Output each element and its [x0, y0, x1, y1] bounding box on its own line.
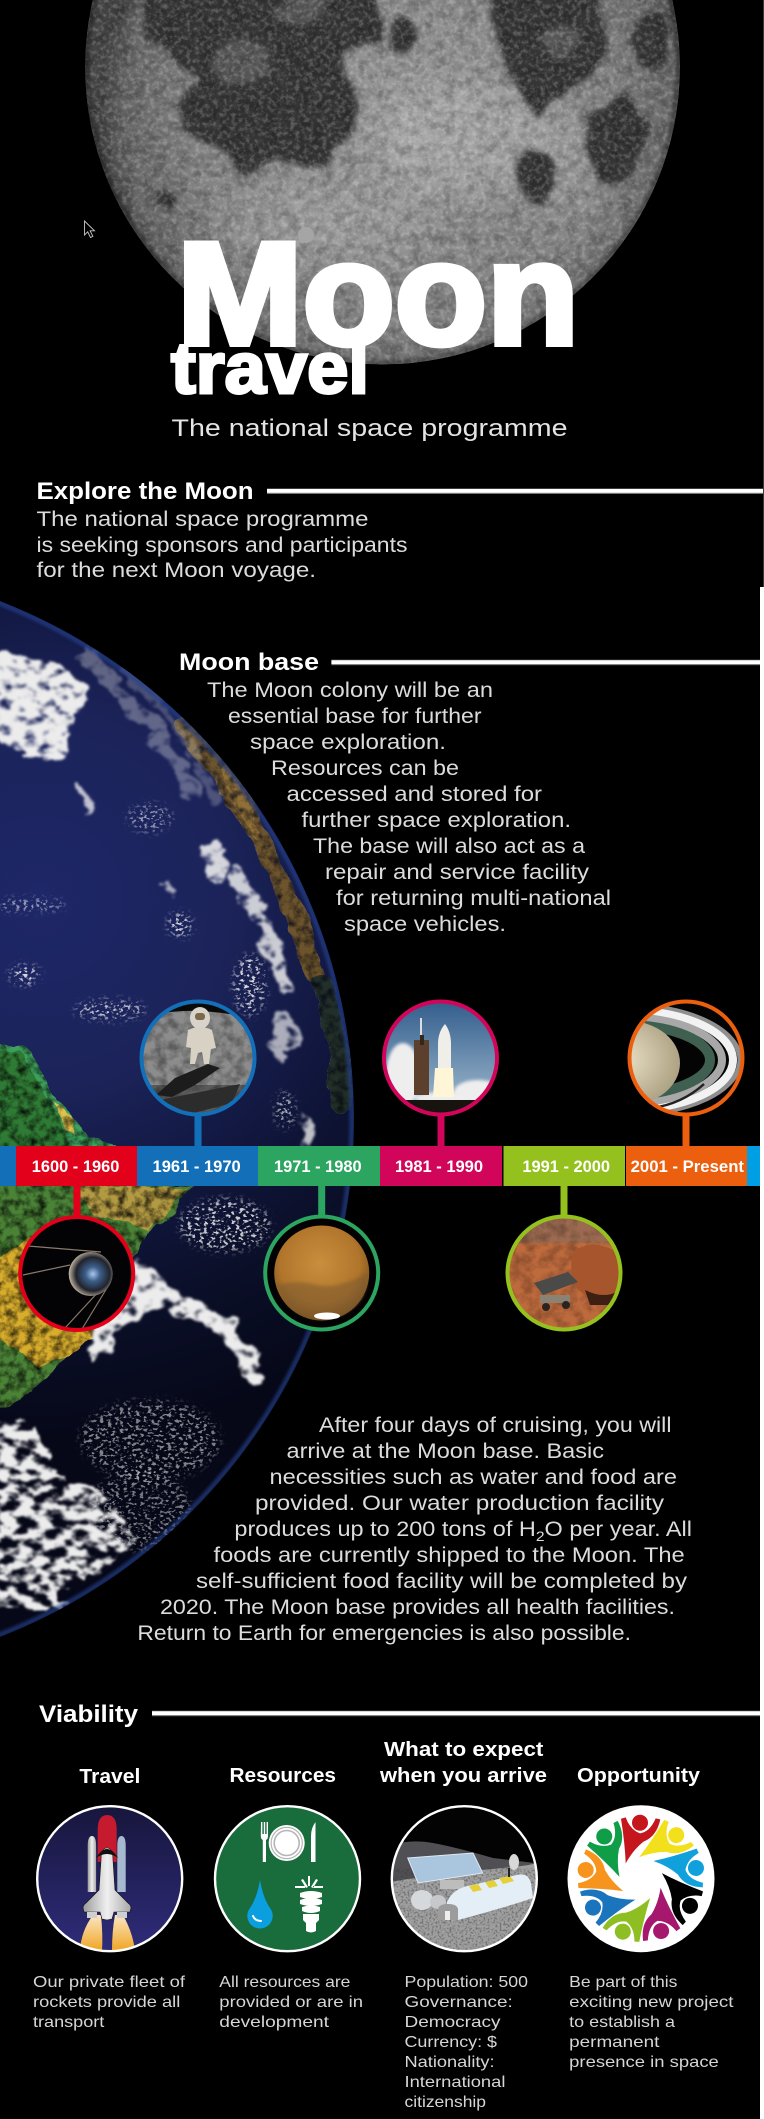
- text block: The Moon colony will be an: [207, 679, 493, 702]
- text: resources column: provided or are in: [219, 1994, 363, 2011]
- text block: arrival at the Moon base: O per year. All: [545, 1518, 692, 1541]
- text: what to expect column: Population: 500: [404, 1974, 528, 1991]
- timeline bar: 1971 - 1980: [274, 1157, 362, 1176]
- text: what to expect column: Democracy: [404, 2014, 500, 2031]
- text: travel column: Our private fleet of: [33, 1974, 186, 1991]
- text: what to expect column: [404, 1974, 528, 2111]
- text: what to expect column: Currency: $: [404, 2034, 497, 2051]
- text: what to expect column: International: [404, 2074, 505, 2091]
- text block: arrival at the Moon base: self-sufficient food facility will be completed by: [196, 1570, 688, 1593]
- connector stems: [74, 1116, 690, 1216]
- heading: Viability: [39, 1701, 139, 1728]
- column headings: [79, 1739, 701, 1788]
- text: opportunity column: presence in space: [569, 2054, 719, 2071]
- section: Explore the Moon: [36, 478, 764, 582]
- photo: Mars rover: [504, 1213, 625, 1333]
- photo: full Moon: [85, 0, 680, 364]
- icon: circle of people: [568, 1805, 714, 1952]
- timeline bar: 1991 - 2000: [522, 1157, 610, 1176]
- text block: is seeking sponsors and participants: [36, 534, 408, 557]
- text block: The base will also act as a: [313, 835, 585, 858]
- thin edge line: [763, 0, 764, 587]
- section: Moon base: [179, 649, 760, 936]
- text block: further space exploration.: [302, 809, 571, 832]
- land: northern South America: [0, 1044, 117, 1146]
- text block: arrival at the Moon base: produces up to 200 tons of H: [234, 1518, 504, 1541]
- text block: arrival at the Moon base: foods are currently shipped to the Moon. The: [214, 1544, 685, 1567]
- column headings: Resources: [230, 1765, 336, 1787]
- title word: Moon: Moon: [177, 212, 579, 375]
- icon: rocket: [37, 1806, 182, 1951]
- text block: The national space programme: [36, 508, 368, 531]
- text block: accessed and stored for: [286, 783, 542, 806]
- atmosphere limb: [0, 565, 352, 1673]
- text: travel column: rockets provide all: [33, 1994, 180, 2011]
- photo: Sputnik: [18, 1215, 136, 1332]
- text: opportunity column: Be part of this: [569, 1974, 677, 1991]
- text block: [207, 679, 611, 936]
- text: travel column: transport: [33, 2014, 105, 2031]
- white strip at right edge: [760, 587, 764, 2119]
- column headings: when you arrive: [379, 1765, 547, 1787]
- timeline bar: 1981 - 1990: [395, 1157, 483, 1176]
- text: resources column: [219, 1974, 363, 2031]
- text: what to expect column: Nationality:: [404, 2054, 495, 2071]
- land: southern South America: [0, 1183, 192, 1412]
- text: opportunity column: [569, 1974, 734, 2071]
- text block: space exploration.: [250, 731, 446, 754]
- text: resources column: development: [219, 2014, 330, 2031]
- icon: food, water and energy: [215, 1806, 360, 1951]
- heading: Moon base: [179, 649, 319, 676]
- clouds: [0, 650, 312, 1612]
- photo: Space Shuttle launch: [380, 998, 502, 1118]
- text block: arrival at the Moon base: [137, 1414, 692, 1645]
- timeline: [0, 998, 760, 1336]
- text block: arrival at the Moon base: After four days of cruising, you will: [319, 1414, 672, 1437]
- text block: [36, 508, 408, 582]
- timeline bar: 1600 - 1960: [32, 1157, 119, 1176]
- column headings: Opportunity: [577, 1765, 701, 1787]
- text block: Resources can be: [271, 757, 459, 780]
- photo: Mars: [262, 1213, 382, 1333]
- icon: Moon colony: [391, 1806, 543, 1954]
- text block: arrival at the Moon base: 2: [536, 1528, 545, 1544]
- column headings: What to expect: [384, 1739, 544, 1761]
- section: Viability: [33, 1701, 760, 2111]
- heading: Explore the Moon: [36, 478, 254, 505]
- subtitle: The national space programme: [172, 415, 568, 442]
- photo: astronaut on the Moon: [138, 998, 258, 1120]
- text block: essential base for further: [228, 705, 482, 728]
- timeline bar: 2001 - Present: [631, 1157, 744, 1176]
- text block: repair and service facility: [325, 861, 590, 884]
- title: Moon travel: [171, 212, 579, 409]
- text: opportunity column: to establish a: [569, 2014, 675, 2031]
- photo: Earth from space: [0, 563, 354, 1675]
- text: opportunity column: permanent: [569, 2034, 660, 2051]
- icon: mouse cursor: [84, 221, 94, 238]
- timeline bar: [0, 1146, 760, 1186]
- text block: arrival at the Moon base: necessities such as water and food are: [270, 1466, 677, 1489]
- text block: arrival at the Moon base: Return to Earth for emergencies is also possible.: [137, 1622, 631, 1645]
- text block: arrival at the Moon base: 2020. The Moon base provides all health facilities.: [160, 1596, 675, 1619]
- text block: arrival at the Moon base: provided. Our water production facility: [255, 1492, 665, 1515]
- column headings: Travel: [79, 1766, 140, 1788]
- text: resources column: All resources are: [219, 1974, 351, 1991]
- text: travel column: [33, 1974, 186, 2031]
- photo: Saturn and its rings: [628, 1000, 744, 1116]
- title word: travel: travel: [171, 329, 369, 409]
- text block: for the next Moon voyage.: [36, 559, 316, 582]
- text: opportunity column: exciting new project: [569, 1994, 734, 2011]
- land: coast along the limb: [186, 728, 342, 1100]
- text: what to expect column: Governance:: [404, 1994, 513, 2011]
- text: what to expect column: citizenship: [404, 2094, 486, 2111]
- timeline bar: 1961 - 1970: [152, 1157, 241, 1176]
- text block: space vehicles.: [344, 913, 506, 936]
- text block: arrival at the Moon base: arrive at the Moon base. Basic: [286, 1440, 604, 1463]
- text block: for returning multi-national: [336, 887, 611, 910]
